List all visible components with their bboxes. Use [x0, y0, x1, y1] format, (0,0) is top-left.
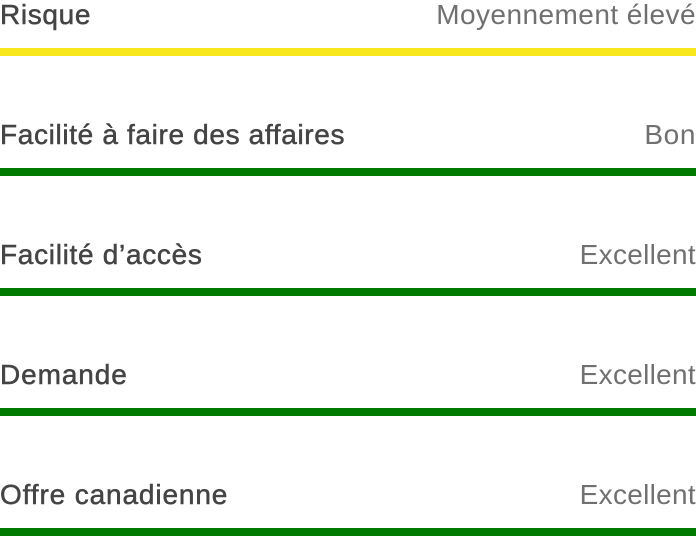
value: Bon: Bon	[644, 119, 696, 150]
row: Facilité à faire des affaires	[0, 119, 696, 176]
label: Facilité d'accès: Facilité d’accès	[0, 239, 203, 270]
label: Offre canadienne: Offre canadienne	[0, 479, 228, 510]
row: Risque	[0, 0, 696, 56]
bar: green rating	[0, 528, 696, 536]
label: Demande: Demande	[0, 359, 128, 390]
value: Excellent: Excellent	[580, 239, 696, 270]
bar: yellow rating	[0, 48, 696, 56]
row: Demande	[0, 359, 696, 416]
bar: green rating	[0, 408, 696, 416]
label: Facilité à faire des affaires: Facilité à faire des affaires	[0, 119, 345, 150]
value: Excellent: Excellent	[580, 479, 696, 510]
row: Facilité d'accès	[0, 239, 696, 296]
bar: green rating	[0, 288, 696, 296]
bar: green rating	[0, 168, 696, 176]
row: Offre canadienne	[0, 479, 696, 536]
value: Excellent: Excellent	[580, 359, 696, 390]
